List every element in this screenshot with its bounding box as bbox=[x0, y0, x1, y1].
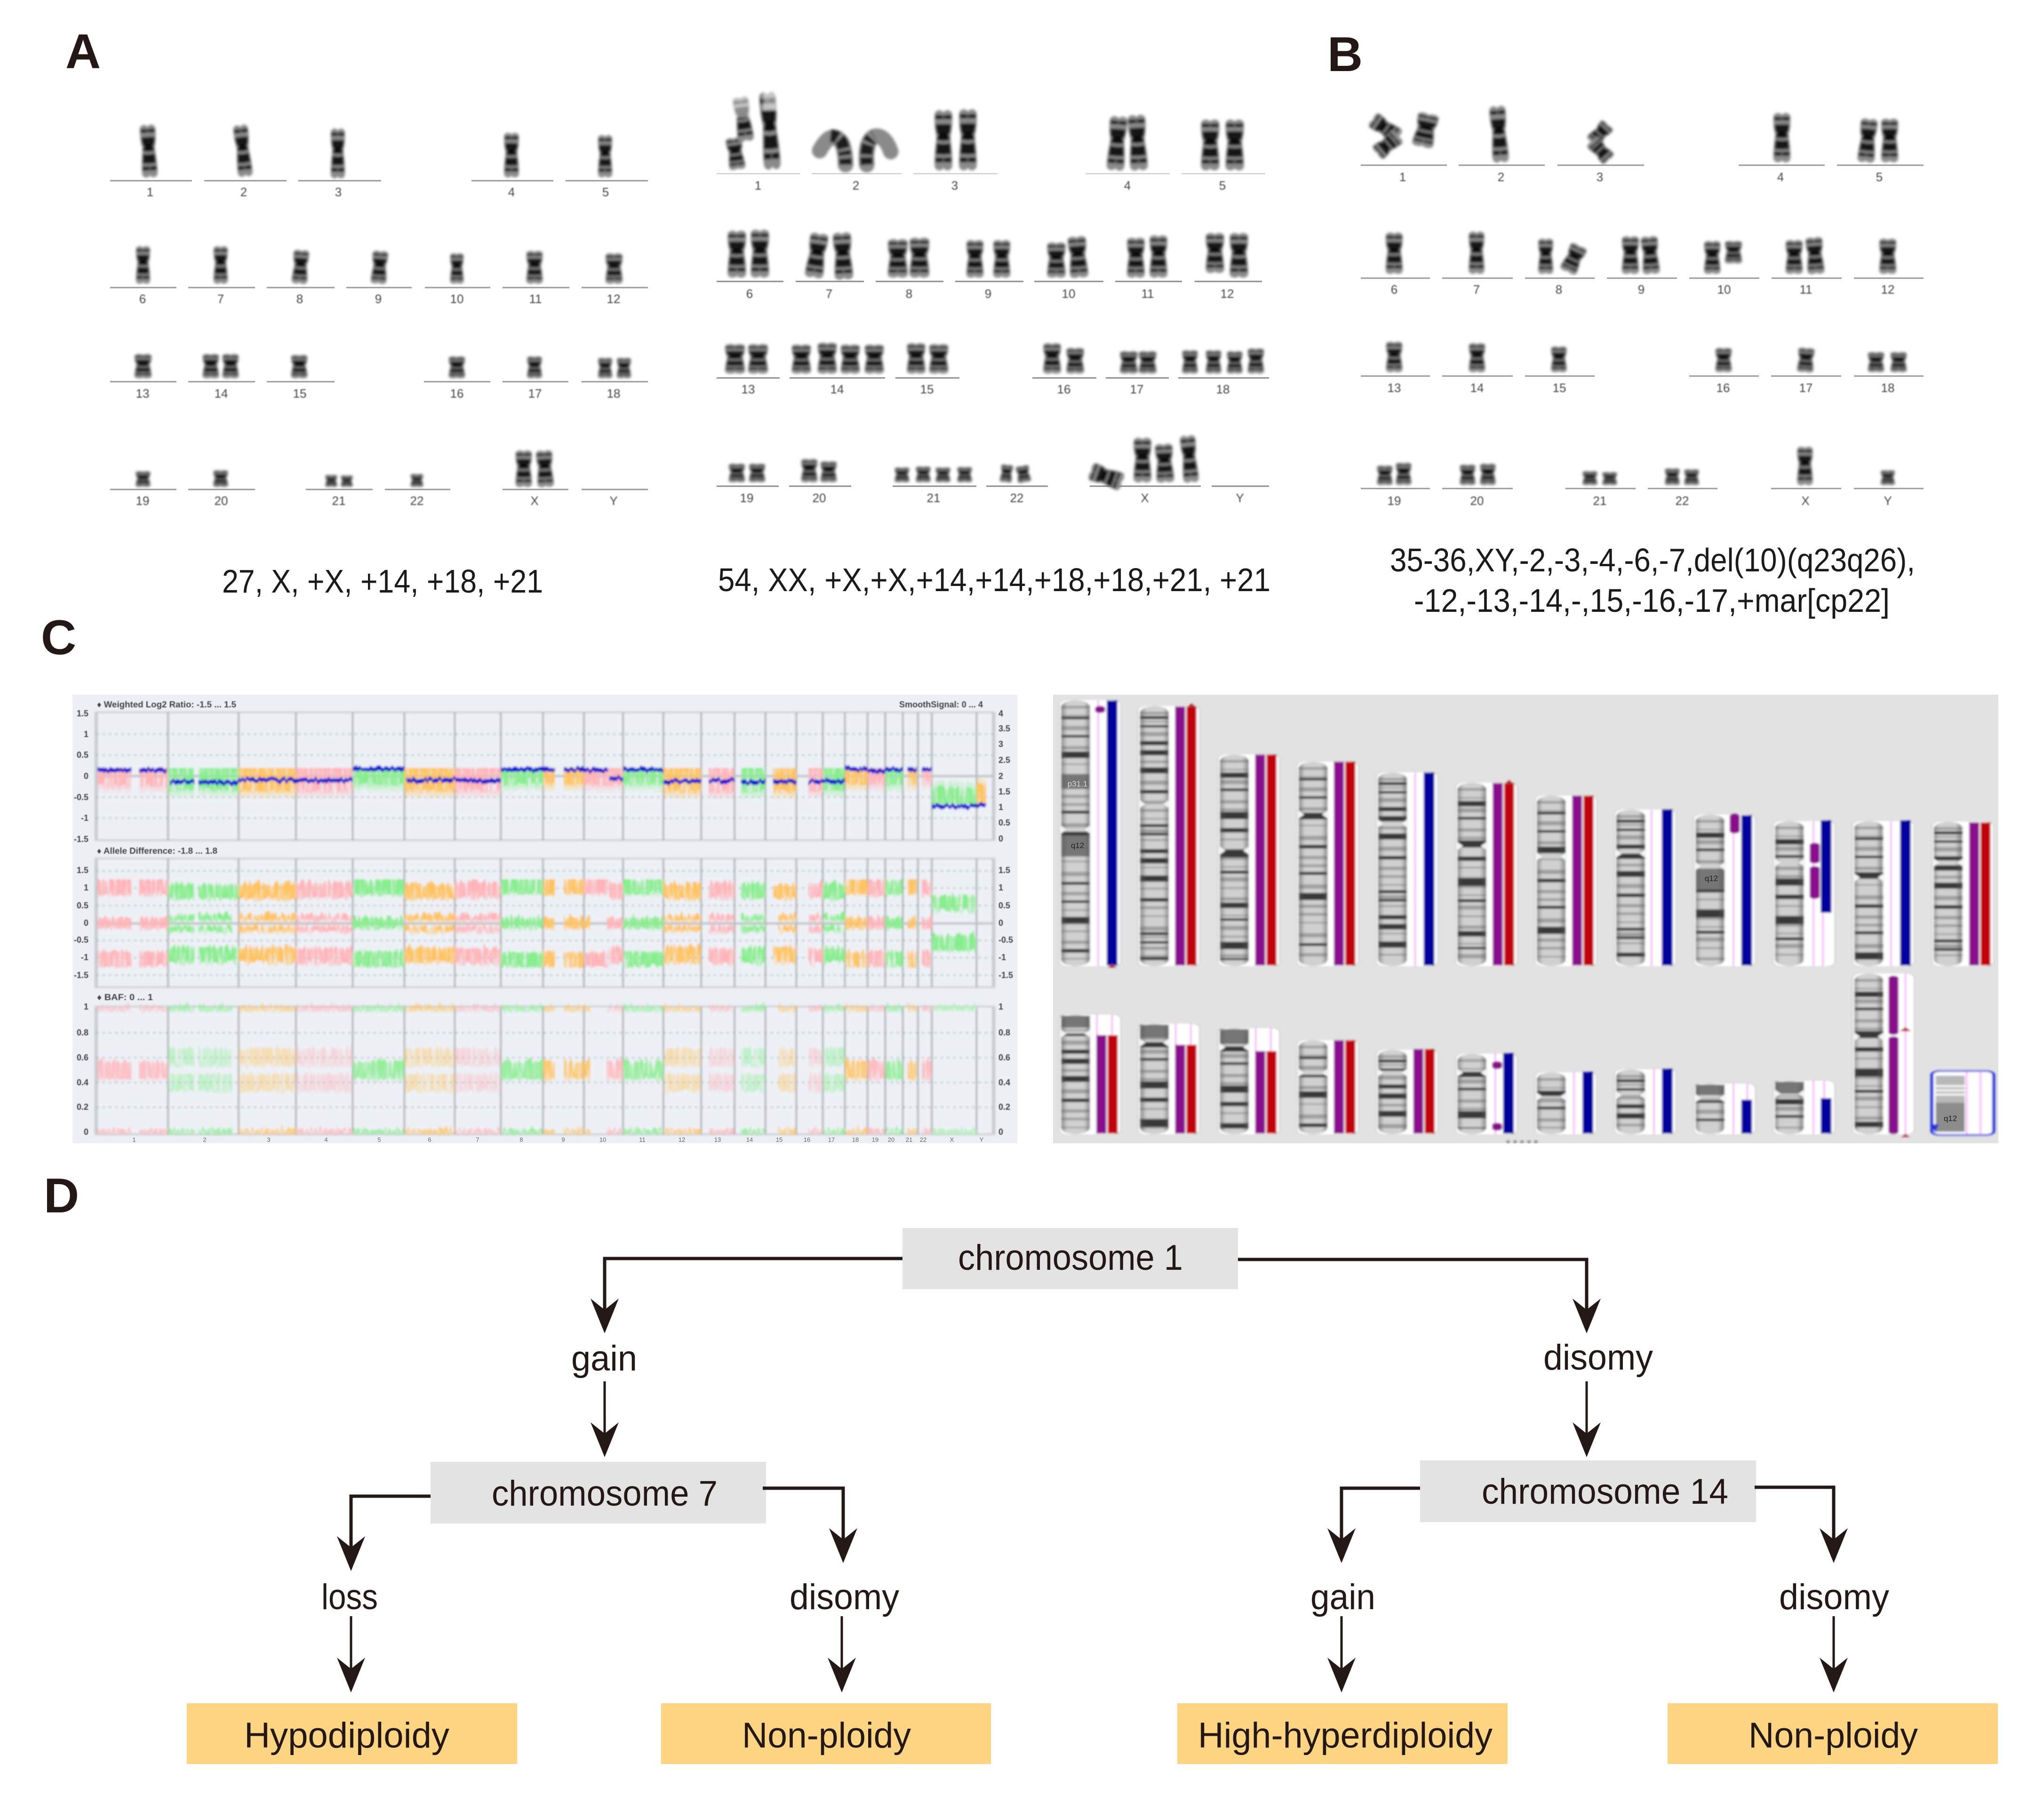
chromosome numbers: 17 bbox=[1130, 382, 1143, 396]
ideogram base shading bbox=[1076, 707, 1948, 1127]
left axis ticks: 0.4 bbox=[77, 1078, 88, 1087]
plot background bbox=[72, 695, 1017, 1143]
three array tracks bbox=[96, 713, 994, 1134]
arrow: chromosome 14 to gain bbox=[1327, 1488, 1420, 1563]
outcome: High-hyperdiploidy: High-hyperdiploidy bbox=[1198, 1716, 1493, 1756]
right axis ticks: 0.2 bbox=[998, 1102, 1010, 1112]
label: loss: loss bbox=[321, 1577, 378, 1617]
chromosome numbers: 17 bbox=[1799, 381, 1812, 395]
chromosome numbers: 19 bbox=[1388, 494, 1401, 508]
chromosome axis labels bbox=[132, 1136, 984, 1143]
chromosome numbers: 6 bbox=[1391, 282, 1397, 297]
chromosome axis labels: 12 bbox=[679, 1136, 685, 1143]
chromosome numbers: Y bbox=[1884, 494, 1892, 508]
chromosome numbers bbox=[1388, 170, 1894, 508]
chromosome numbers: 13 bbox=[742, 382, 755, 396]
panel C: copy number array plots bbox=[72, 695, 1017, 1143]
right axis ticks: 0.5 bbox=[998, 818, 1010, 827]
chromosome numbers: 7 bbox=[217, 292, 224, 306]
left axis ticks: -0.5 bbox=[74, 935, 88, 945]
chromosome numbers: 21 bbox=[332, 494, 345, 508]
panel A: second karyogram bbox=[717, 89, 1270, 598]
chromosome axis labels: 4 bbox=[324, 1136, 328, 1143]
left axis ticks: 1.5 bbox=[77, 709, 88, 718]
pink guide lines bbox=[1097, 700, 1906, 1134]
chromosome numbers: 14 bbox=[215, 386, 228, 401]
right axis ticks: 0.5 bbox=[998, 901, 1010, 910]
chromosome numbers: 12 bbox=[1881, 282, 1894, 297]
chromosome numbers: 21 bbox=[1593, 494, 1606, 508]
panel D: decision tree bbox=[44, 1169, 1998, 1764]
chromosome numbers: Y bbox=[609, 494, 618, 508]
chromosome axis labels: 13 bbox=[714, 1136, 721, 1143]
chromosome numbers: 16 bbox=[1057, 382, 1070, 396]
arrow: gain to high-hyperdiploidy bbox=[1327, 1616, 1356, 1692]
chromosome numbers: 19 bbox=[136, 494, 149, 508]
chromosome numbers: 3 bbox=[1597, 170, 1603, 184]
karyogram baselines lower rows bbox=[717, 281, 1269, 486]
chromosome numbers: 2 bbox=[240, 185, 247, 199]
chromosome axis labels: 2 bbox=[203, 1136, 207, 1143]
chromosome axis labels: Y bbox=[980, 1136, 984, 1143]
karyogram baselines bbox=[110, 181, 648, 489]
chromosome numbers: 15 bbox=[293, 386, 306, 401]
chromosome numbers: 20 bbox=[1470, 494, 1484, 508]
arrow: chromosome 7 to disomy bbox=[763, 1488, 857, 1563]
panel B: karyogram bbox=[1327, 27, 1924, 619]
chromosome numbers: 16 bbox=[450, 386, 463, 401]
plot frames bbox=[96, 713, 994, 1134]
panel A: first karyogram bbox=[65, 24, 648, 600]
chromosomes 1 to Y bbox=[729, 89, 1261, 487]
chromosome axis labels: 3 bbox=[267, 1136, 271, 1143]
chromosome numbers: 10 bbox=[1717, 282, 1731, 297]
chromosome numbers: 14 bbox=[830, 382, 844, 396]
chromosome numbers: 5 bbox=[602, 185, 609, 199]
ideogram medium bands bbox=[1076, 706, 1948, 1129]
chromosome numbers: 18 bbox=[1216, 382, 1230, 396]
chromosome axis labels: 19 bbox=[872, 1136, 878, 1143]
chromosome numbers: 12 bbox=[1221, 287, 1234, 301]
chromosome numbers: 18 bbox=[1881, 381, 1894, 395]
track 3: B allele frequency bbox=[97, 1009, 976, 1132]
right axis ticks: -1.5 bbox=[998, 970, 1013, 980]
chromosome numbers: X bbox=[1801, 494, 1810, 508]
chromosome numbers: 15 bbox=[920, 382, 934, 396]
chromosomes 1 to Y bbox=[1372, 110, 1903, 484]
right axis ticks: 1 bbox=[998, 1002, 1003, 1011]
chromosome numbers: 5 bbox=[1219, 178, 1226, 192]
panel letter B: B bbox=[1327, 27, 1363, 82]
panel C: ideogram view bbox=[1053, 695, 1998, 1143]
right axis ticks: -0.5 bbox=[998, 935, 1013, 945]
chromosome numbers: 22 bbox=[410, 494, 423, 508]
right axis ticks: 4 bbox=[998, 709, 1003, 718]
chromosome numbers: 11 bbox=[529, 292, 542, 306]
chromosome numbers: 17 bbox=[528, 386, 542, 401]
heterochromatin blocks bbox=[1076, 774, 1789, 1095]
panel letter C: C bbox=[41, 610, 76, 665]
right axis ticks: 3 bbox=[998, 739, 1003, 749]
left axis ticks: -1 bbox=[81, 813, 88, 823]
left axis ticks: -1 bbox=[81, 953, 88, 962]
right axis ticks: 0.8 bbox=[998, 1028, 1010, 1037]
left axis ticks: 0.2 bbox=[77, 1102, 88, 1112]
karyotype caption: 54, XX, +X,+X,+14,+14,+18,+18,+21, +21 bbox=[718, 561, 1270, 598]
arrow: disomy to non-ploidy bbox=[828, 1616, 856, 1692]
band labels: q12 bbox=[1944, 1114, 1957, 1123]
chromosome numbers: 7 bbox=[1473, 282, 1480, 297]
copy number markers bbox=[1108, 704, 1911, 1137]
right axis ticks: 0 bbox=[998, 1127, 1003, 1137]
right axis ticks: 2 bbox=[998, 771, 1003, 781]
small purple segments bbox=[1100, 708, 1893, 1132]
chromosome numbers: 22 bbox=[1676, 494, 1689, 508]
band labels: q12 bbox=[1705, 874, 1718, 883]
node: chromosome 14: chromosome 14 bbox=[1482, 1472, 1728, 1512]
white chromosome cards bbox=[1059, 699, 1994, 1135]
karyogram baselines bbox=[717, 173, 1265, 174]
chromosome numbers: 19 bbox=[740, 491, 753, 505]
chromosome numbers: 10 bbox=[450, 292, 463, 306]
chromosome axis labels: 14 bbox=[746, 1136, 753, 1143]
chromosome axis labels: 8 bbox=[519, 1136, 523, 1143]
blue segment bars bbox=[1112, 700, 1906, 1134]
right axis ticks: -1 bbox=[998, 953, 1006, 962]
chromosome numbers bbox=[136, 185, 620, 508]
chromosome axis labels: 6 bbox=[428, 1136, 431, 1143]
chromosome numbers: 18 bbox=[607, 386, 620, 401]
right axis ticks: 1 bbox=[998, 802, 1003, 812]
selected Y chromosome card bbox=[1931, 1071, 1994, 1135]
left axis ticks: -1.5 bbox=[74, 970, 88, 980]
arrow: chromosome 7 to loss bbox=[337, 1496, 431, 1571]
left axis ticks bbox=[74, 709, 88, 1137]
left axis ticks: 0.8 bbox=[77, 1028, 88, 1037]
chromosome axis labels: 18 bbox=[852, 1136, 859, 1143]
node: chromosome 7: chromosome 7 bbox=[492, 1474, 718, 1514]
node: chromosome 7 bbox=[431, 1462, 766, 1523]
left axis ticks: 1 bbox=[84, 1002, 88, 1011]
right axis ticks: 1 bbox=[998, 883, 1003, 892]
left axis ticks: 0.5 bbox=[77, 901, 88, 910]
chromosome numbers: 2 bbox=[853, 178, 859, 192]
chromosome numbers: 1 bbox=[755, 178, 761, 192]
left axis ticks: 0 bbox=[84, 1127, 88, 1137]
chromosome numbers: 11 bbox=[1142, 287, 1154, 301]
left axis ticks: 1.5 bbox=[77, 866, 88, 875]
chromosome numbers: 12 bbox=[607, 292, 620, 306]
red segment bars bbox=[1113, 706, 1986, 1134]
centromere notches bbox=[1060, 799, 1964, 1103]
left axis ticks: 0.5 bbox=[77, 750, 88, 760]
chromosome numbers: 6 bbox=[139, 292, 146, 306]
chromosome numbers: 20 bbox=[813, 491, 826, 505]
track headings: SmoothSignal: 0 ... 4 bbox=[899, 700, 983, 709]
arrow: disomy to chromosome 14 bbox=[1573, 1381, 1601, 1457]
track headings: ♦ BAF: 0 ... 1 bbox=[97, 993, 153, 1002]
label: disomy: disomy bbox=[790, 1577, 899, 1617]
track headings: ♦ Weighted Log2 Ratio: -1.5 ... 1.5 bbox=[97, 700, 236, 709]
arrow: chromosome 14 to disomy bbox=[1755, 1487, 1848, 1563]
chromosome numbers: 4 bbox=[1777, 170, 1784, 184]
karyotype caption second line: -12,-13,-14,-,15,-16,-17,+mar[cp22] bbox=[1414, 582, 1890, 619]
chromosome numbers: 15 bbox=[1553, 381, 1566, 395]
chromosomes 1 to Y bbox=[138, 128, 628, 486]
node: chromosome 1 bbox=[902, 1228, 1238, 1289]
outcome: Non-ploidy: Non-ploidy bbox=[1749, 1716, 1918, 1756]
chromosome numbers: 8 bbox=[906, 287, 912, 301]
left axis ticks: 1 bbox=[84, 883, 88, 892]
band labels: q12 bbox=[1071, 841, 1084, 850]
karyotype caption: 27, X, +X, +14, +18, +21 bbox=[222, 563, 543, 600]
ideogram dark bands group 3 bbox=[1154, 754, 1869, 1129]
chromosome numbers: 9 bbox=[1638, 282, 1645, 297]
chromosome axis labels: 9 bbox=[561, 1136, 565, 1143]
chromosome numbers: 13 bbox=[1388, 381, 1401, 395]
label: gain: gain bbox=[1310, 1577, 1375, 1617]
chromosome axis labels: 10 bbox=[599, 1136, 606, 1143]
track headings bbox=[97, 700, 983, 1002]
chromosome numbers: 11 bbox=[1799, 282, 1812, 297]
chromosome numbers: X bbox=[1141, 491, 1149, 505]
chromosome axis labels: 17 bbox=[828, 1136, 835, 1143]
purple segment bars bbox=[1102, 706, 1974, 1134]
outcome: Non-ploidy bbox=[1668, 1703, 1998, 1764]
chromosome numbers: 21 bbox=[927, 491, 940, 505]
ideogram cylinder shading bbox=[1076, 707, 1948, 1127]
chromosome numbers: 14 bbox=[1470, 381, 1484, 395]
chromosome numbers: 5 bbox=[1876, 170, 1883, 184]
chromosome numbers: 22 bbox=[1010, 491, 1023, 505]
left axis ticks: -0.5 bbox=[74, 793, 88, 802]
chromosome numbers: 7 bbox=[826, 287, 832, 301]
label: gain: gain bbox=[571, 1339, 637, 1379]
chromosome numbers: 9 bbox=[375, 292, 382, 306]
right axis ticks: 1.5 bbox=[998, 866, 1010, 875]
chromosome axis labels: 1 bbox=[132, 1136, 136, 1143]
chromosome numbers: 1 bbox=[1399, 170, 1406, 184]
chromosome numbers: 3 bbox=[335, 185, 342, 199]
left axis ticks: 1 bbox=[84, 730, 88, 739]
chromosome axis labels: X bbox=[950, 1136, 954, 1143]
outcome: Non-ploidy bbox=[661, 1703, 991, 1764]
track headings: ♦ Allele Difference: -1.8 ... 1.8 bbox=[97, 846, 217, 856]
chromosome axis labels: 5 bbox=[377, 1136, 381, 1143]
chromosome axis labels: 11 bbox=[639, 1136, 646, 1143]
chromosome numbers: 2 bbox=[1498, 170, 1504, 184]
chromosome numbers: X bbox=[530, 494, 539, 508]
chromosome numbers: 3 bbox=[951, 178, 958, 192]
left axis ticks: 0.6 bbox=[77, 1053, 88, 1062]
node: chromosome 1: chromosome 1 bbox=[958, 1238, 1183, 1278]
chromosome axis labels: 21 bbox=[906, 1136, 912, 1143]
track 2: allele difference bbox=[97, 887, 976, 961]
chromosome axis labels: 20 bbox=[888, 1136, 894, 1143]
outcome: Hypodiploidy bbox=[187, 1703, 517, 1764]
chromosome numbers: 13 bbox=[136, 386, 149, 401]
outcome: Hypodiploidy: Hypodiploidy bbox=[244, 1716, 449, 1756]
chromosome numbers: 1 bbox=[147, 185, 153, 199]
node: chromosome 14 bbox=[1420, 1460, 1756, 1522]
right axis ticks: 0 bbox=[998, 918, 1003, 928]
chromosome axis labels: 22 bbox=[920, 1136, 926, 1143]
arrow: gain to chromosome 7 bbox=[591, 1381, 619, 1457]
left axis ticks: 0 bbox=[84, 771, 88, 781]
label: disomy: disomy bbox=[1779, 1577, 1889, 1617]
arrow: loss to hypodiploidy bbox=[337, 1616, 365, 1692]
arrow: chromosome 1 to disomy bbox=[1238, 1259, 1601, 1333]
right axis ticks: 0.4 bbox=[998, 1078, 1010, 1087]
right axis ticks: 3.5 bbox=[998, 724, 1010, 733]
outcome: High-hyperdiploidy bbox=[1177, 1703, 1508, 1764]
chromosome ideograms bbox=[1059, 699, 1994, 1142]
chromosome axis labels: 7 bbox=[476, 1136, 479, 1143]
chromosome axis labels: 15 bbox=[776, 1136, 782, 1143]
band labels bbox=[1068, 779, 1957, 1123]
karyotype caption: 35-36,XY,-2,-3,-4,-6,-7,del(10)(q23q26), bbox=[1390, 542, 1915, 578]
arrow: disomy to non-ploidy bbox=[1820, 1616, 1848, 1692]
panel letter A: A bbox=[65, 24, 101, 79]
ideogram background bbox=[1053, 695, 1998, 1143]
chromosome numbers: 4 bbox=[1124, 178, 1131, 192]
left axis ticks: -1.5 bbox=[74, 834, 88, 844]
ideogram dark bands group 2 bbox=[1076, 706, 1948, 1129]
chromosome numbers bbox=[740, 178, 1244, 505]
right axis ticks: 0.6 bbox=[998, 1053, 1010, 1062]
right axis ticks bbox=[998, 709, 1013, 1137]
chromosome numbers: 8 bbox=[296, 292, 303, 306]
karyogram baselines bbox=[1361, 165, 1924, 489]
chromosome numbers: 20 bbox=[215, 494, 228, 508]
chromosome numbers: 6 bbox=[746, 287, 753, 301]
chromosome numbers: 10 bbox=[1062, 287, 1075, 301]
label: disomy: disomy bbox=[1543, 1338, 1653, 1378]
page dots bbox=[1507, 1140, 1539, 1143]
ideogram dark bands group 1 bbox=[1076, 700, 1869, 1129]
track 1: weighted log2 ratio bbox=[97, 769, 986, 806]
panel letter D: D bbox=[44, 1169, 79, 1223]
chromosome numbers: 8 bbox=[1556, 282, 1562, 297]
chromosome numbers: 9 bbox=[985, 287, 991, 301]
right axis ticks: 0 bbox=[998, 834, 1003, 843]
chromosome axis labels: 16 bbox=[804, 1136, 810, 1143]
arrow: chromosome 1 to gain bbox=[591, 1259, 902, 1333]
band labels: p31.1 bbox=[1068, 779, 1087, 788]
chromosome numbers: 4 bbox=[508, 185, 515, 199]
chromosome numbers: 16 bbox=[1717, 381, 1730, 395]
right axis ticks: 1.5 bbox=[998, 787, 1010, 796]
right axis ticks: 2.5 bbox=[998, 755, 1010, 765]
outcome: Non-ploidy: Non-ploidy bbox=[742, 1716, 911, 1756]
left axis ticks: 0 bbox=[84, 918, 88, 928]
chromosome numbers: Y bbox=[1236, 491, 1244, 505]
